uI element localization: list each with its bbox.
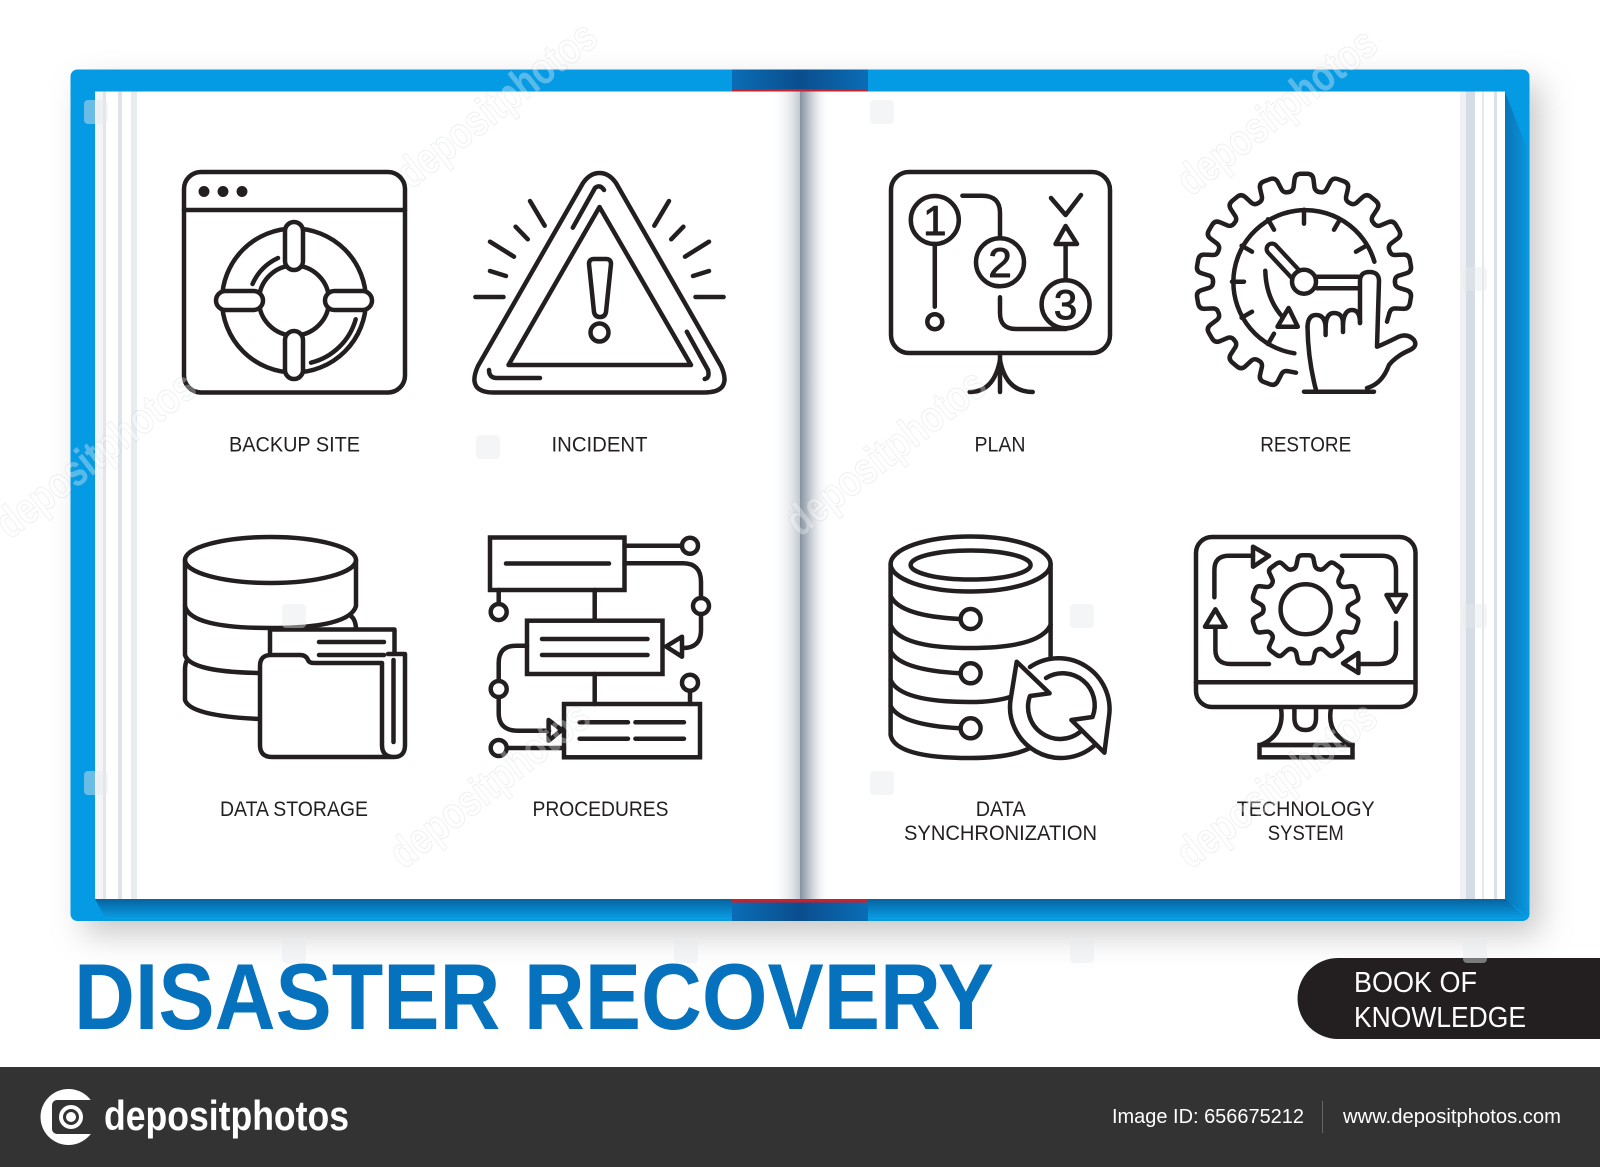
label: technology system	[1237, 798, 1375, 845]
footer image id: Image ID: 656675212	[1112, 1106, 1304, 1128]
icon: plan presentation board: 2	[988, 239, 1012, 286]
watermarks: depositphotos	[1167, 692, 1386, 878]
icon: backup site	[184, 172, 405, 392]
watermarks: depositphotos	[776, 360, 995, 546]
label: incident: INCIDENT	[552, 434, 648, 456]
title: DISASTER RECOVERY	[74, 944, 994, 1049]
label: backup site: BACKUP SITE	[229, 434, 360, 456]
pages	[95, 92, 1505, 899]
footer bar	[0, 1067, 1600, 1167]
badge: book of knowledge: BOOK OF	[1354, 967, 1477, 999]
icon: plan presentation board	[891, 172, 1110, 392]
footer website: www.depositphotos.com	[1342, 1106, 1561, 1128]
label: data synchronization: SYNCHRONIZATION	[904, 822, 1097, 845]
badge: book of knowledge	[1298, 958, 1600, 1039]
watermarks: depositphotos	[380, 692, 599, 878]
label: technology system: TECHNOLOGY	[1237, 798, 1375, 821]
footer logo: depositphotos	[104, 1092, 349, 1139]
icon: data synchronization	[891, 536, 1112, 758]
icon: plan presentation board: 3	[1054, 281, 1077, 328]
badge: book of knowledge: KNOWLEDGE	[1354, 1002, 1526, 1034]
icon: procedures flowchart	[490, 538, 709, 757]
book	[70, 70, 1530, 921]
book cover	[70, 70, 1530, 921]
icon: plan presentation board: 1	[923, 197, 946, 244]
label: data storage: DATA STORAGE	[220, 798, 368, 821]
label: data synchronization: DATA	[976, 798, 1026, 821]
icon: technology system monitor	[1196, 537, 1416, 757]
icon: incident warning triangle	[474, 173, 725, 392]
icon: data storage	[185, 537, 405, 757]
footer logo	[40, 1089, 349, 1145]
book drop shadow	[84, 84, 1540, 934]
label: technology system: SYSTEM	[1268, 822, 1344, 845]
label: procedures: PROCEDURES	[532, 798, 668, 821]
label: data synchronization	[904, 798, 1097, 845]
icon: restore gear with clock and hand	[1195, 174, 1415, 392]
label: plan: PLAN	[974, 434, 1026, 456]
watermarks	[0, 12, 1487, 963]
label: restore: RESTORE	[1260, 434, 1351, 456]
